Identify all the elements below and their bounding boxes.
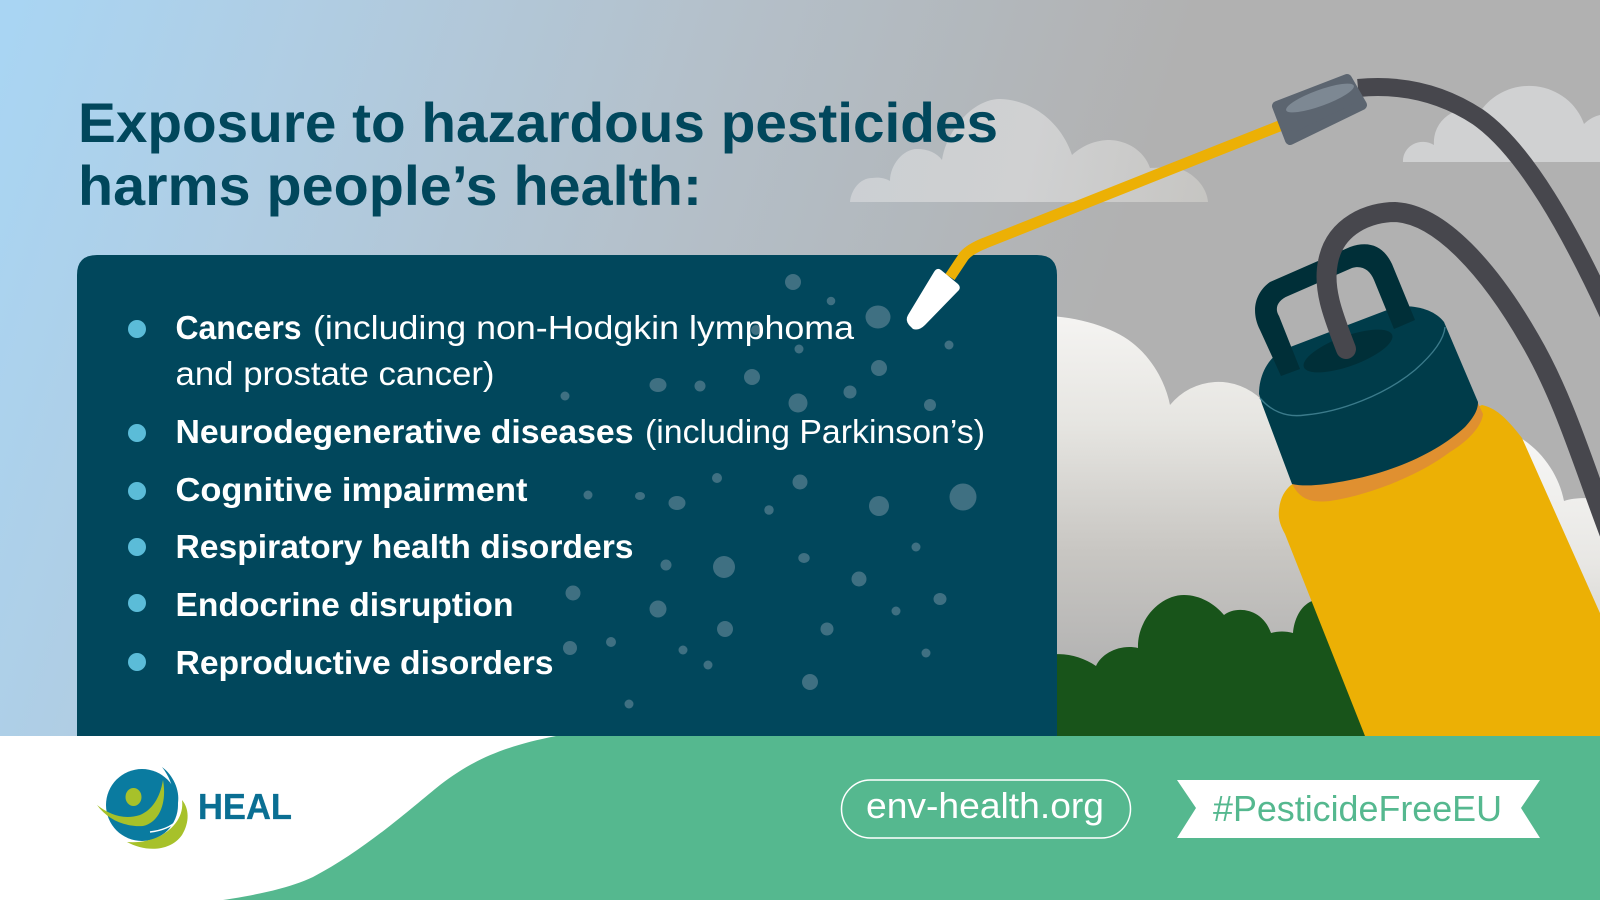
hose: upper [1358, 87, 1600, 322]
hashtag ribbon: #PesticideFreeEU [1213, 788, 1502, 829]
bottle collar [1292, 403, 1483, 501]
bottle cap [1259, 306, 1478, 485]
title [78, 91, 998, 217]
cap seam [1260, 327, 1445, 416]
item: neurodegenerative [128, 413, 985, 450]
website pill [842, 780, 1130, 838]
cap opening [1299, 321, 1397, 381]
spray droplets [560, 274, 976, 708]
bottle body [1279, 405, 1600, 736]
item: reproductive: Reproductive disorders [176, 644, 554, 681]
cloud: right edge [1500, 428, 1600, 720]
hashtag ribbon [1177, 780, 1540, 838]
item: endocrine: Endocrine disruption [176, 586, 514, 623]
cloud: top centre [850, 99, 1208, 202]
logo: HEAL [97, 767, 292, 849]
item: cancers [128, 309, 855, 392]
hose: lower [1326, 212, 1600, 540]
wand [950, 125, 1282, 277]
nozzle over panel [907, 243, 985, 330]
panel: health effects [77, 255, 1057, 736]
spray handle grip [1277, 78, 1362, 140]
item: cancers: (including non-Hodgkin lymphoma [313, 309, 855, 346]
item: respiratory: Respiratory health disorders [176, 528, 634, 565]
footer [0, 736, 1600, 900]
bush [1050, 595, 1400, 740]
item: cancers: and prostate cancer) [176, 355, 494, 392]
title: harms people’s health: [78, 154, 702, 217]
title: Exposure to hazardous pesticides [78, 91, 998, 154]
cloud: large white behind sprayer [1050, 316, 1400, 700]
bullet list [128, 309, 985, 681]
carry handle [1255, 244, 1415, 376]
item: cognitive: Cognitive impairment [176, 471, 528, 508]
sprayer [950, 78, 1600, 736]
item: cancers: Cancers [176, 309, 302, 346]
item: neurodegenerative: Neurodegenerative diseases [176, 413, 634, 450]
website pill: env-health.org [866, 785, 1104, 826]
item: neurodegenerative: (including Parkinson’s) [645, 413, 985, 450]
logo: HEAL: HEAL [198, 786, 292, 827]
cloud: top right [1403, 86, 1600, 162]
